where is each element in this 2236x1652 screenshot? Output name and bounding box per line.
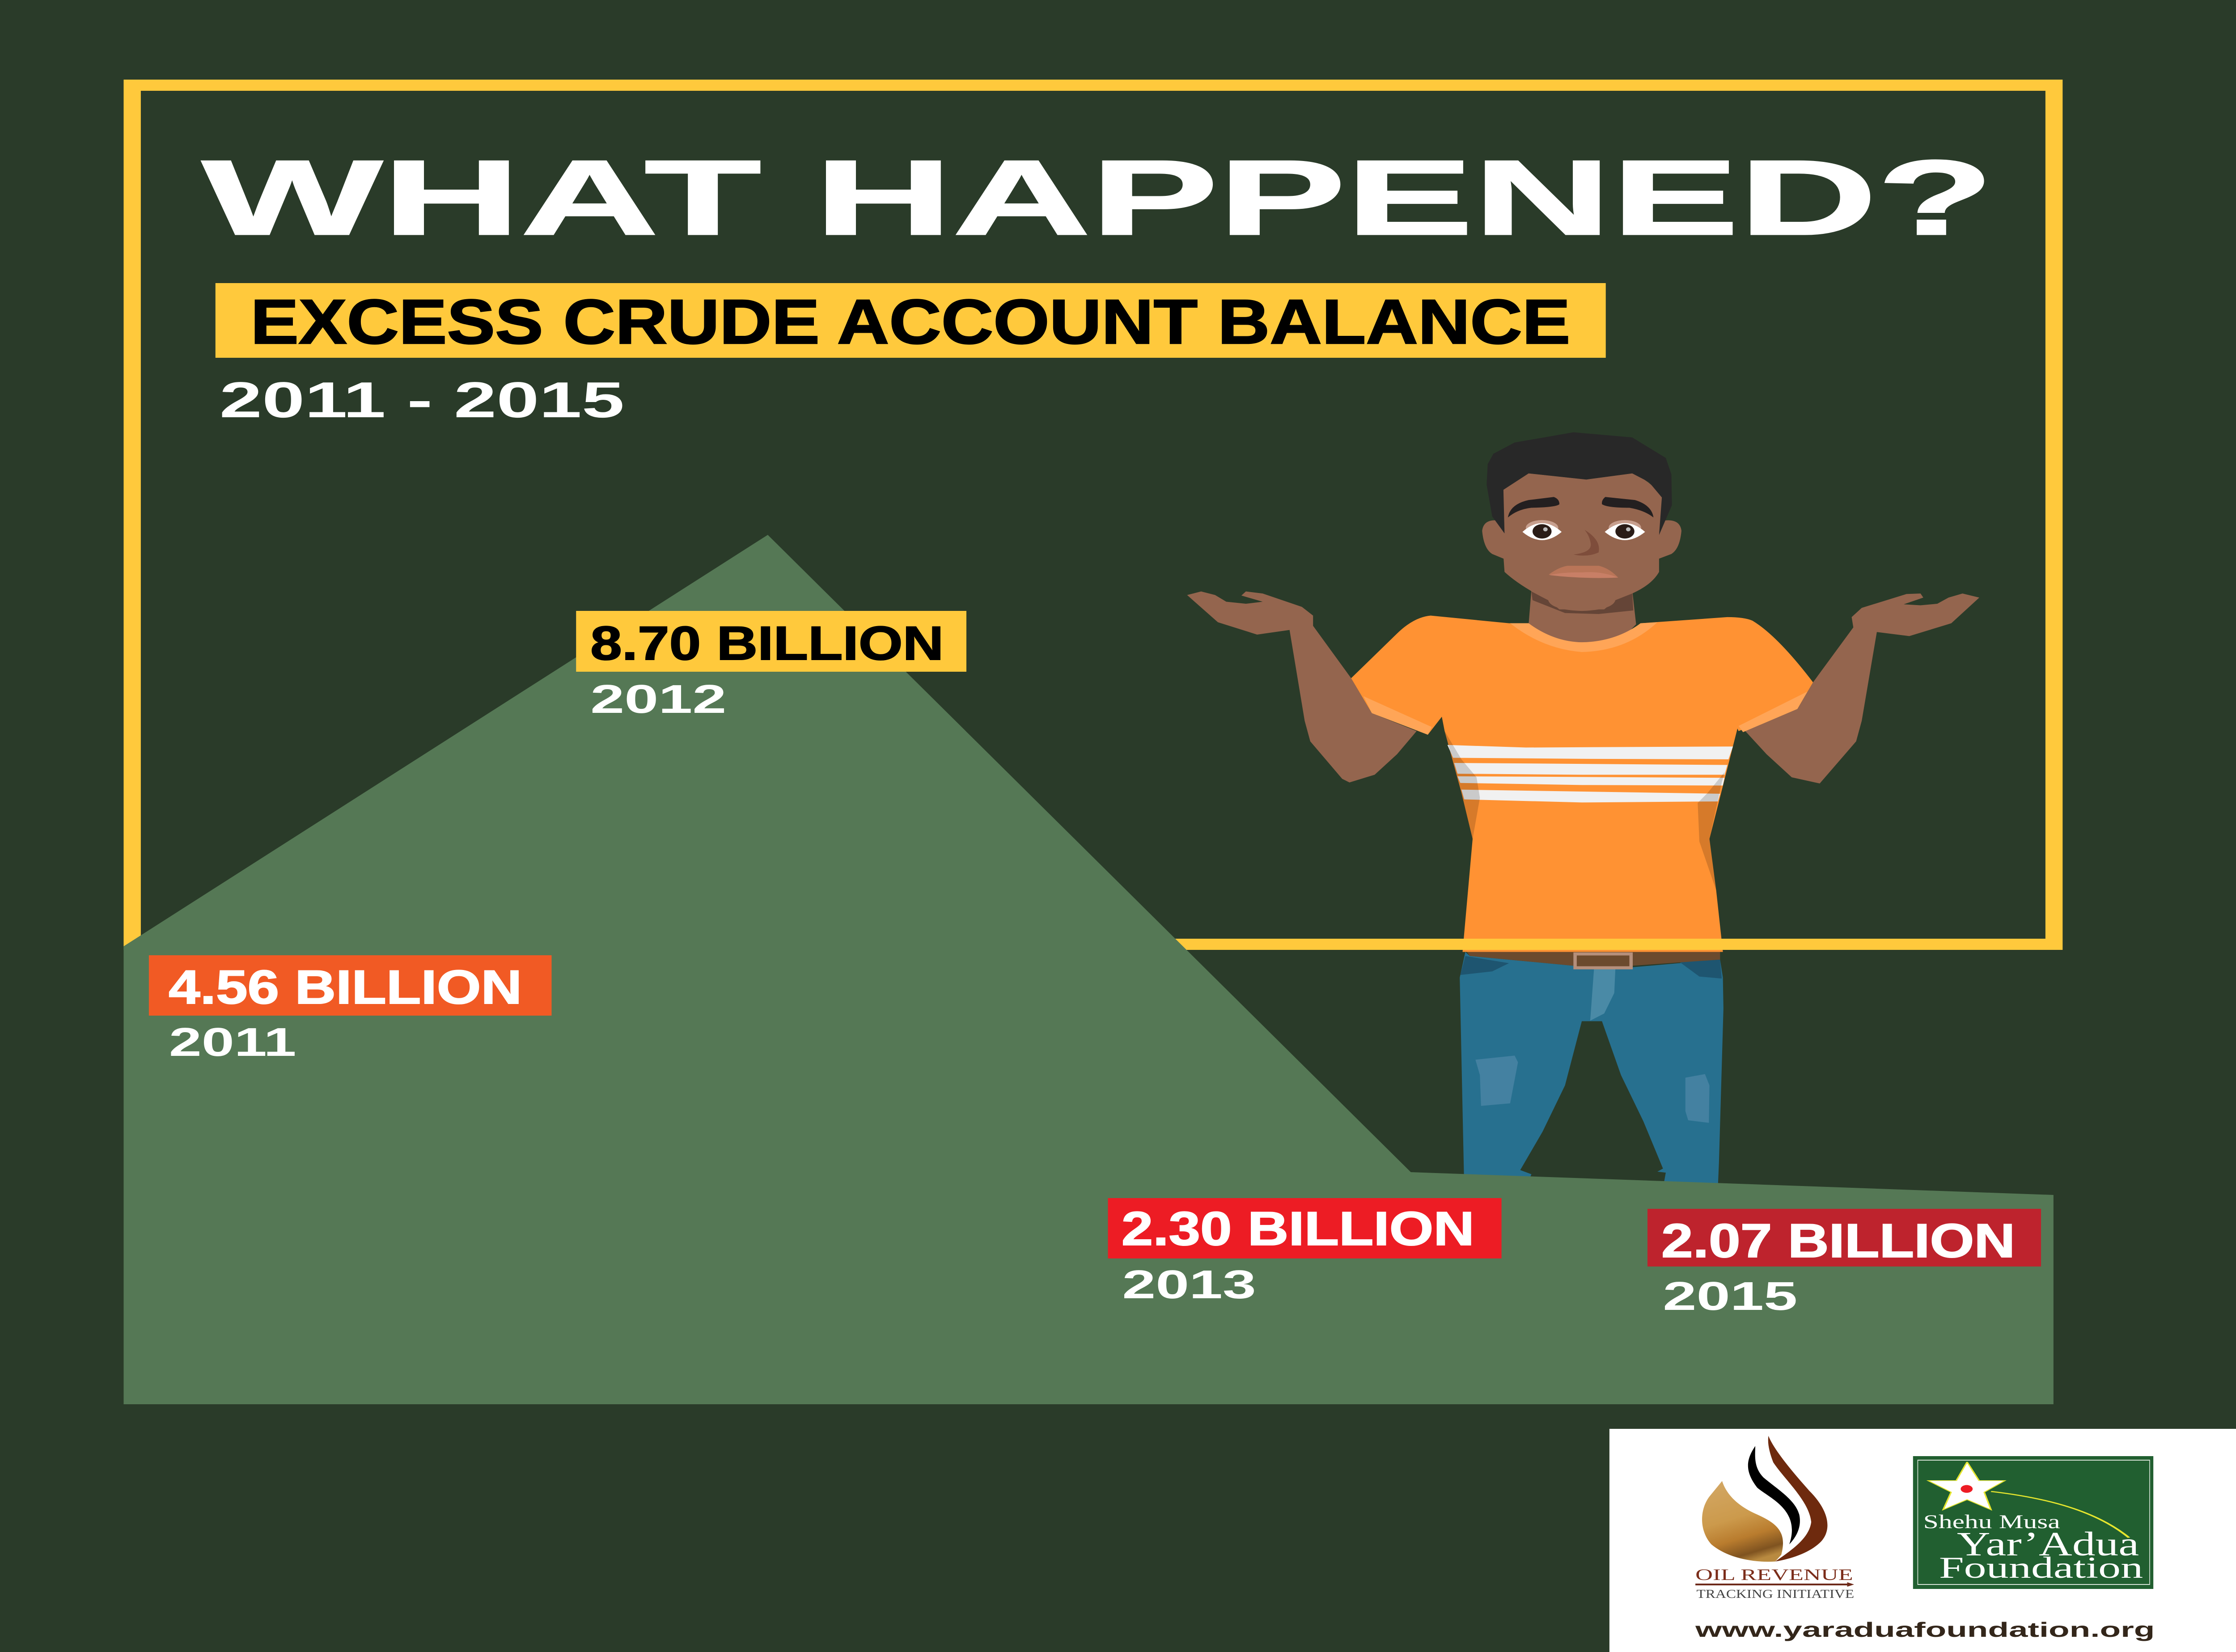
nose	[1573, 530, 1599, 555]
belt	[1465, 950, 1720, 968]
logo: shehu musa yar'adua foundation: Foundation	[1939, 1551, 2143, 1584]
footer logos panel	[1609, 1429, 2236, 1652]
left arm and hand	[1187, 592, 1417, 783]
text: 8.70 BILLION	[590, 616, 944, 670]
label: 2013 value: 2013	[1122, 1262, 1256, 1307]
eyes	[1522, 520, 1645, 540]
logo: oil revenue tracking initiative: OIL REVENUE	[1695, 1566, 1853, 1584]
logo: oil revenue tracking initiative	[1695, 1436, 1854, 1601]
jeans	[1460, 952, 1724, 1188]
illustration: shrugging man	[1187, 432, 1979, 1188]
label: 2015 value: 2015	[1663, 1274, 1797, 1319]
eyebrows	[1508, 497, 1653, 517]
label: 2012 value	[576, 611, 966, 722]
label: 2015 value	[1647, 1209, 2041, 1319]
logo: oil revenue tracking initiative: TRACKING INITIATIVE	[1697, 1588, 1854, 1601]
yellow frame	[123, 80, 2062, 950]
logo: shehu musa yar'adua foundation: Yar’Adua	[1957, 1525, 2139, 1563]
mouth	[1549, 566, 1618, 578]
label: 2011 value	[149, 955, 551, 1065]
green mountain chart	[123, 535, 2054, 1404]
label: 2011 value: 2011	[169, 1020, 296, 1065]
date range: 2011 - 2015	[220, 372, 624, 428]
subtitle banner	[216, 283, 1606, 358]
icon: flame	[1702, 1436, 1827, 1562]
ears	[1482, 520, 1681, 559]
logo: shehu musa yar'adua foundation	[1913, 1456, 2153, 1589]
right arm and hand	[1745, 593, 1979, 784]
website url: www.yaraduafoundation.org	[1694, 1618, 2155, 1641]
face	[1503, 473, 1663, 611]
shirt stripes	[1448, 745, 1733, 802]
label: 2013 value	[1108, 1198, 1502, 1307]
neck	[1529, 590, 1636, 645]
hair	[1486, 432, 1672, 535]
label: 2012 value: 2012	[590, 677, 726, 722]
text: 4.56 BILLION	[169, 960, 522, 1014]
icon: star and comet trail	[1928, 1462, 2129, 1538]
neck shadow	[1531, 592, 1633, 614]
t-shirt	[1351, 615, 1813, 952]
logo: shehu musa yar'adua foundation: Shehu Musa	[1923, 1512, 2060, 1533]
